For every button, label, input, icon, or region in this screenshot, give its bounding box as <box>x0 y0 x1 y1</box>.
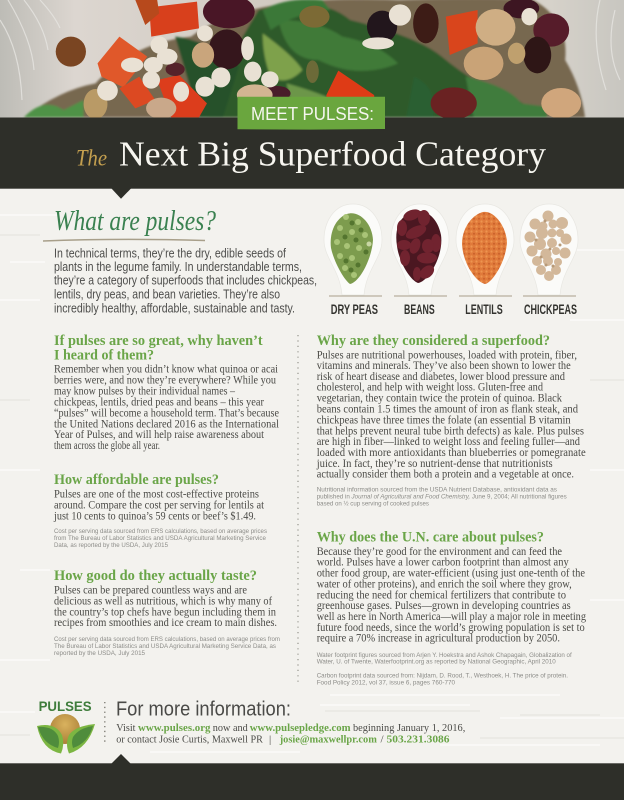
heading: If pulses are so great, why haven’t <box>54 333 263 349</box>
body text: berries were, and now they’re everywhere? While you <box>54 372 276 386</box>
badge: meet pulses: MEET PULSES: <box>251 103 374 124</box>
body text: vegetarian, they contain twice the protein of quinoa. Black <box>317 391 562 405</box>
logo sun <box>50 714 80 744</box>
lentils and seeds <box>56 37 86 67</box>
section: what are pulses <box>43 205 317 315</box>
body text: future food needs, since the world’s growing population is set to <box>317 620 585 634</box>
heading: I heard of them? <box>54 347 154 363</box>
body text: Because they’re good for the environment and can feed the <box>317 544 562 558</box>
label: chickpeas: CHICKPEAS <box>524 302 577 317</box>
contact line 1: Visit <box>116 722 136 734</box>
heading: what are pulses: What are pulses? <box>54 205 216 237</box>
spoon: beans <box>391 204 449 317</box>
body text: greenhouse gases. Pulses—grown in developing countries as <box>317 598 571 612</box>
footer contact <box>116 699 466 746</box>
source note <box>317 487 567 508</box>
top dark title band <box>0 118 624 189</box>
block: how affordable <box>53 472 268 549</box>
contact line 2: or contact Josie Curtis, Maxwell PR <box>116 734 264 746</box>
body text: Pulses are one of the most cost-effective proteins <box>54 487 259 501</box>
source note: published in Journal of Agricultural and Food Chemistry, June 9, 2004; All nutritional figures <box>317 494 567 500</box>
barley <box>97 4 537 102</box>
heading: Why are they considered a superfood? <box>317 333 550 349</box>
body text: well as here in North America—will play a major role in meeting <box>317 609 586 623</box>
body text: Pulses can be prepared countless ways and are <box>54 582 247 596</box>
intro paragraph: lentils, dry peas, and bean varieties. They’re also <box>54 287 280 302</box>
body text: cholesterol, and help with weight loss. Gluten-free and <box>317 380 543 394</box>
body text: around. Compare the cost per serving for lentils at <box>54 498 265 512</box>
source note <box>54 528 268 549</box>
spoon: chickpeas <box>520 204 578 317</box>
source note: Cost per serving data sourced from ERS calculations, based on average prices <box>54 528 268 535</box>
body text: may know pulses by their individual names – <box>54 384 236 398</box>
source note: Nutritional information sourced from the USDA Nutrient Database, antioxidant data as <box>317 487 558 494</box>
source note: based on ½ cup serving of cooked pulses <box>317 500 430 508</box>
body text: Pulses are nutritional powerhouses, loaded with protein, fiber, <box>317 347 577 361</box>
body text: Remember when you didn’t know what quinoa or acai <box>54 362 279 376</box>
body text: the United Nations declared 2016 as the International <box>54 416 280 430</box>
block: why the U.N. cares <box>317 530 586 686</box>
block: why superfood <box>316 333 586 508</box>
dark beans <box>209 29 245 69</box>
bottom dark band <box>0 763 624 800</box>
source note: Cost per serving data sourced from ERS calculations, based on average prices from <box>54 636 280 643</box>
source note: Data, as reported by the USDA, July 2015 <box>54 542 168 549</box>
heading: How affordable are pulses? <box>54 472 219 488</box>
bottom band pointer <box>112 754 130 764</box>
source note: from The Bureau of Labor Statistics and USDA Agricultural Marketing Service <box>54 535 266 542</box>
source notes <box>317 652 572 686</box>
body text <box>317 544 586 645</box>
intro paragraph: plants in the legume family. In understandable terms, <box>54 259 302 274</box>
heading: Why does the U.N. care about pulses? <box>317 530 544 546</box>
body text: vitamins and minerals. They’ve also been shown to lower the <box>317 358 571 372</box>
body text: them across the globe all year. <box>54 438 160 452</box>
intro paragraph <box>54 245 317 315</box>
body text: the country’s top chefs have begun including them in <box>54 604 276 618</box>
body text: loaded with more antioxidants than blueberries or pomegranate <box>317 445 586 459</box>
heading <box>54 333 263 363</box>
logo: pulses <box>37 698 95 754</box>
contact line 2: | <box>269 734 271 746</box>
body text <box>53 487 265 522</box>
source notes: Water footprint figures sourced from Arjen Y. Hoekstra and Ashok Chapagain, Globalization of <box>317 652 572 659</box>
source note: reported by the USDA, July 2015 <box>54 650 145 657</box>
body text: reducing the need for chemical fertilizers that contribute to <box>317 587 566 601</box>
body text: risk of heart disease and diabetes, lower blood pressure and <box>317 369 565 383</box>
body text: require a 70% increase in agricultural production by 2050. <box>317 631 560 645</box>
source notes: Carbon footprint data sourced from: Nijdam, D. Rood, T., Westhoek, H. The price of protein. <box>317 672 568 679</box>
label: lentils: LENTILS <box>465 302 503 317</box>
title: The <box>76 146 107 171</box>
body text: delicious as well as nutritious, which is why many of <box>54 593 272 607</box>
intro paragraph: they’re a category of superfoods that includes chickpeas, <box>54 273 317 288</box>
source note: The Bureau of Labor Statistics and USDA Agricultural Marketing Service Data, as <box>54 643 277 650</box>
band pointer <box>112 188 131 199</box>
body text: just 10 cents to quinoa’s 59 cents or beef’s $1.49. <box>53 508 256 522</box>
logo: pulses: PULSES <box>39 698 92 714</box>
logo leaves <box>37 724 95 754</box>
spoon: lentils <box>456 204 514 317</box>
label: dry peas: DRY PEAS <box>331 302 378 317</box>
contact line 2: 503.231.3086 <box>386 734 450 746</box>
contact line 1: www.pulses.org <box>138 722 211 734</box>
body text: other food group, are water-efficient (using just one-tenth of the <box>317 566 585 580</box>
contact line 1: www.pulsepledge.com <box>250 722 351 734</box>
body text: world. Pulses have a lower carbon footprint than almost any <box>317 555 569 569</box>
header food photo <box>0 0 624 119</box>
title: Next Big Superfood Category <box>119 135 546 174</box>
body text: that helps prevent neural tube birth defects) as kale. Plus pulses <box>317 423 584 437</box>
body text: Year of Pulses, and will help raise awareness about <box>54 427 265 441</box>
body text: chickpeas have three times the folate (an essential B vitamin <box>317 412 571 426</box>
spoons row <box>324 204 578 317</box>
contact line 2 <box>116 734 450 746</box>
source notes: Water, U. of Twente, Waterfootprint.org as reported by National Geographic, April 2010 <box>317 659 556 666</box>
contact line 2: / <box>380 734 384 746</box>
block: how good do they taste <box>54 568 280 657</box>
contact line 1: now and <box>213 722 248 734</box>
source note <box>54 636 280 657</box>
label: beans: BEANS <box>404 302 435 317</box>
body text: recipes from smoothies and ice cream to main dishes. <box>54 615 277 629</box>
contact line 2: josie@maxwellpr.com <box>279 734 377 746</box>
brush underline <box>43 239 205 241</box>
red peppers <box>149 2 199 37</box>
body text <box>54 582 277 629</box>
body text: “pulses” will become a household term. That’s because <box>54 406 279 420</box>
badge: meet pulses <box>238 97 385 130</box>
heading: How good do they actually taste? <box>54 568 257 584</box>
intro paragraph: incredibly healthy, affordable, sustainable and tasty. <box>54 300 295 315</box>
contact line 1 <box>116 722 466 734</box>
body text <box>54 362 280 452</box>
source notes: Food Policy 2012, vol 37, issue 6, pages 760-770 <box>317 679 455 686</box>
body text: juice. In fact, they’re so nutrient-dense that nutritionists <box>316 456 553 470</box>
body text: water of other proteins), and enrich the soil where they grow, <box>317 576 572 590</box>
body text: chickpeas, lentils, dried peas and beans – this year <box>54 395 264 409</box>
body text: are high in fiber—linked to weight loss and feeling fuller—and <box>317 434 580 448</box>
body text: beans contain 1.5 times the amount of iron as flank steak, and <box>317 402 578 416</box>
spoon: dry peas <box>324 204 382 317</box>
dotted logo divider <box>104 702 106 743</box>
body text <box>316 347 586 481</box>
column divider <box>297 335 299 684</box>
chickpeas <box>476 9 515 46</box>
block: why haven't I heard of them <box>54 333 280 452</box>
contact line 1: beginning January 1, 2016, <box>353 722 466 734</box>
body text: actually consider them both a protein and a vegetable at once. <box>317 467 574 481</box>
intro paragraph: In technical terms, they’re the dry, edible seeds of <box>54 245 286 260</box>
heading: for more information: For more information: <box>116 699 291 721</box>
